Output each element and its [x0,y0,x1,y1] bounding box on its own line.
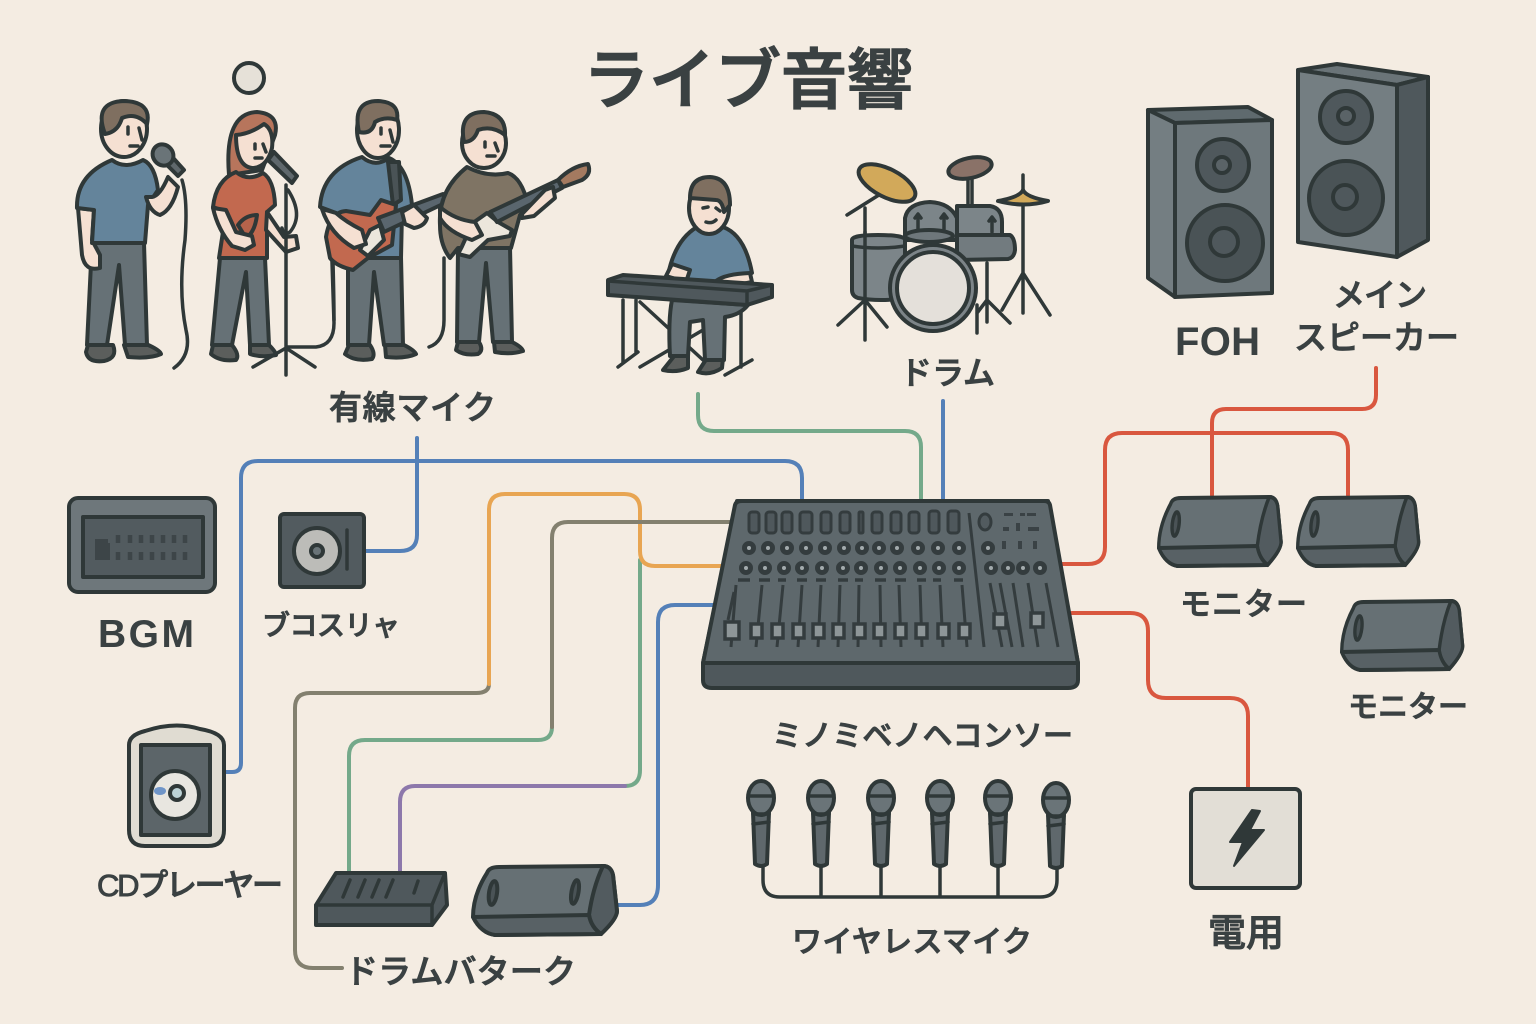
label: wired mic: 有線マイク [329,389,496,426]
cable: mixer to monitors [1060,433,1348,564]
knobs [742,544,1044,572]
mic 2 [808,781,834,866]
label: main speaker [1294,277,1459,356]
label: CD player: CDプレーヤー [97,868,283,903]
mic 3 [868,781,894,866]
label: mixer console: ミノミベノヘコンソー [772,720,1073,753]
label: FOH: FOH [1175,320,1260,364]
device: CD player [129,725,224,846]
cable: mixer to power [1072,613,1248,790]
person: guitarist [320,101,470,360]
floor monitor [473,866,617,935]
person: vocalist [77,101,188,368]
fader caps [725,613,1043,639]
title: ライブ音響 [583,43,913,117]
cable: CD player to mixer [224,461,802,772]
speaker: main [1298,64,1428,257]
label: player: ブコスリャ [262,610,400,641]
icon: spotlight circle [234,63,264,93]
cable: orange [489,494,722,684]
mic 6 [1043,783,1069,868]
drum kit [838,154,1050,340]
person: bassist [429,112,589,354]
cable: drums to mixer [941,401,945,501]
wireless microphones [748,781,1069,897]
mic 5 [985,781,1011,866]
device: drum pad [316,873,447,925]
label: monitor 1: モニター [1180,587,1307,622]
monitor speakers [1159,497,1463,670]
person: female singer [211,112,334,375]
label: main speaker: スピーカー [1294,319,1459,356]
meters [749,511,959,533]
device: player [280,514,364,587]
monitor C [1342,601,1463,670]
mic 1 [748,781,774,866]
cable: keyboard to mixer [698,394,921,501]
cable: green to drum pad [349,727,552,872]
cable: purple to drum pad [400,786,625,872]
cable: main speaker to monitor [1212,368,1376,495]
fader tracks [728,513,1058,647]
monitor A [1159,497,1281,566]
mixer console [703,501,1078,688]
cable: gray from mixer [552,522,730,727]
device: power [1191,789,1300,888]
device: BGM [69,498,215,592]
label: main speaker: メイン [1333,277,1427,313]
cable: floor monitor to mixer [618,605,715,905]
cables [224,368,1376,968]
cable: green lower [620,560,640,786]
cable: gray to drum pad label [295,684,489,968]
mic 4 [927,781,953,866]
person: keyboardist [608,177,772,375]
label: drums: ドラム [900,355,995,391]
monitor B [1298,497,1419,566]
fader dashes [738,578,963,582]
label: monitor 2: モニター [1348,691,1468,724]
cable: wired mic to player [365,438,417,551]
label: BGM: BGM [98,613,194,656]
label: power: 電用 [1208,913,1284,955]
master controls [979,513,1039,549]
speaker: FOH [1148,107,1272,297]
label: wireless mic: ワイヤレスマイク [792,926,1032,959]
label: drum patch: ドラムバターク [345,953,576,990]
